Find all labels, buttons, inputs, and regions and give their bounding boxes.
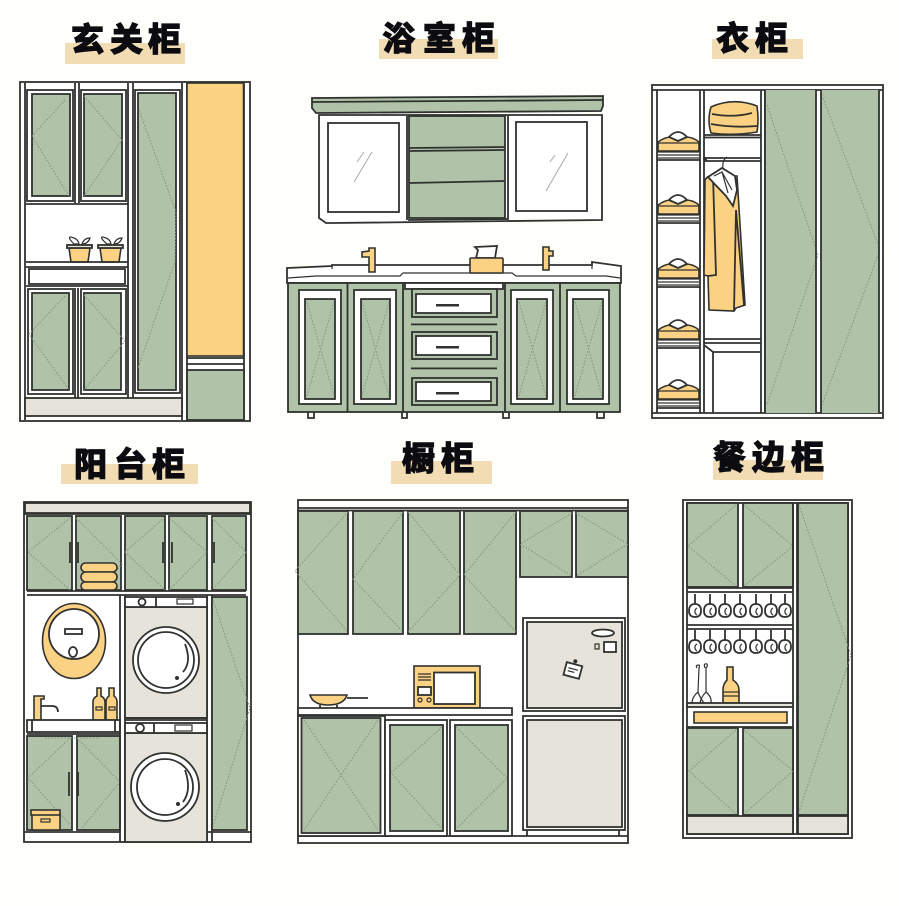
icon: wok bbox=[310, 695, 368, 708]
sliding door right bbox=[821, 90, 880, 413]
folded clothes stacks bbox=[657, 132, 700, 408]
lower box bbox=[704, 339, 761, 413]
door 4 bbox=[567, 290, 609, 404]
heading: 阳台柜: 阳台柜 bbox=[74, 446, 185, 483]
icon: storage box bbox=[31, 810, 60, 830]
central divider bbox=[120, 595, 212, 842]
upper doors bbox=[687, 503, 793, 587]
left mirror bbox=[328, 123, 399, 212]
panel: 餐边柜 bbox=[683, 439, 852, 838]
drawer 3 bbox=[412, 378, 497, 405]
lower doors bbox=[27, 736, 120, 830]
lower door right bbox=[450, 720, 512, 836]
lower right green panel bbox=[187, 358, 244, 420]
lower door left bbox=[28, 289, 73, 394]
upper cabinet door left bbox=[27, 90, 73, 201]
clothes rod and shelf bbox=[703, 135, 761, 161]
counter shelf bbox=[26, 262, 128, 286]
panel: 橱柜 bbox=[295, 440, 628, 843]
icon: spoons bbox=[692, 664, 711, 703]
icon: hanging coat bbox=[704, 157, 745, 311]
heading: 餐边柜: 餐边柜 bbox=[713, 439, 824, 476]
cabinet frame bbox=[20, 82, 250, 421]
shelf bbox=[27, 591, 246, 595]
cabinet frame bbox=[683, 500, 852, 838]
upper right doors bbox=[520, 511, 628, 577]
wall cabinet bbox=[312, 96, 603, 223]
tall door bbox=[793, 503, 851, 834]
counter top bbox=[287, 262, 621, 283]
lower door middle bbox=[385, 720, 447, 836]
upper doors bbox=[27, 516, 246, 590]
drawer 1 bbox=[412, 289, 497, 317]
door 2 bbox=[354, 290, 396, 404]
cabinet frame bbox=[298, 500, 628, 843]
icon: round wall mirror bbox=[42, 604, 106, 678]
yellow full-height panel bbox=[187, 83, 244, 356]
plinth bbox=[687, 816, 848, 834]
panel: 浴室柜 bbox=[287, 20, 621, 418]
wardrobe frame bbox=[652, 85, 883, 418]
lower door left bbox=[298, 716, 385, 836]
washer bottom bbox=[125, 723, 207, 842]
fridge lower bbox=[523, 716, 625, 836]
base plinth bbox=[25, 398, 182, 416]
heading: 浴室柜: 浴室柜 bbox=[382, 20, 495, 57]
icon: right faucet bbox=[543, 247, 553, 270]
upper cabinet doors bbox=[295, 511, 516, 634]
cabinet frame bbox=[24, 502, 251, 842]
icon: tissue box bbox=[470, 246, 503, 273]
icon: potted plants bbox=[67, 237, 123, 262]
icon: wine bottle bbox=[723, 667, 739, 703]
sliding door left bbox=[765, 90, 818, 413]
top strip bbox=[405, 283, 503, 289]
green shelves bbox=[407, 115, 508, 220]
icon: bottles bbox=[93, 688, 117, 720]
icon: faucet bbox=[34, 696, 58, 720]
lower doors bbox=[687, 728, 793, 815]
wine glass rack top bbox=[687, 588, 793, 617]
panel: 玄关柜 bbox=[20, 21, 250, 421]
countertop bbox=[298, 708, 512, 715]
panel: 衣柜 bbox=[652, 20, 883, 418]
tall side door bbox=[212, 597, 250, 830]
open niche line bbox=[26, 203, 128, 205]
door 3 bbox=[511, 290, 553, 404]
foot x4 bbox=[308, 412, 604, 418]
wine glass rack bottom bbox=[687, 625, 793, 653]
right mirror bbox=[516, 122, 587, 211]
base bbox=[288, 283, 620, 412]
tall door bbox=[135, 90, 180, 393]
heading: 橱柜: 橱柜 bbox=[402, 440, 474, 477]
lower door right bbox=[81, 289, 126, 394]
drawer 2 bbox=[412, 332, 497, 359]
icon: microwave bbox=[414, 666, 480, 708]
upper cabinet door right bbox=[81, 90, 126, 201]
icon: left faucet bbox=[362, 248, 375, 272]
icon: towels bbox=[81, 563, 117, 590]
bottom strip bbox=[24, 831, 120, 833]
fridge freezer bbox=[523, 618, 625, 711]
heading: 衣柜: 衣柜 bbox=[716, 20, 788, 57]
cabinet body bbox=[319, 115, 602, 223]
washer top bbox=[125, 597, 207, 718]
sink counter bbox=[27, 720, 120, 734]
crown moulding bbox=[312, 96, 603, 113]
icon: pillow bbox=[709, 102, 758, 134]
heading: 玄关柜: 玄关柜 bbox=[71, 21, 181, 58]
icon: fridge note bbox=[563, 657, 584, 679]
panel: 阳台柜 bbox=[24, 446, 251, 842]
vanity cabinet bbox=[287, 246, 621, 418]
heading: 橱柜 bbox=[391, 440, 492, 484]
shelf and drawer bbox=[687, 703, 793, 727]
door 1 bbox=[299, 290, 341, 404]
